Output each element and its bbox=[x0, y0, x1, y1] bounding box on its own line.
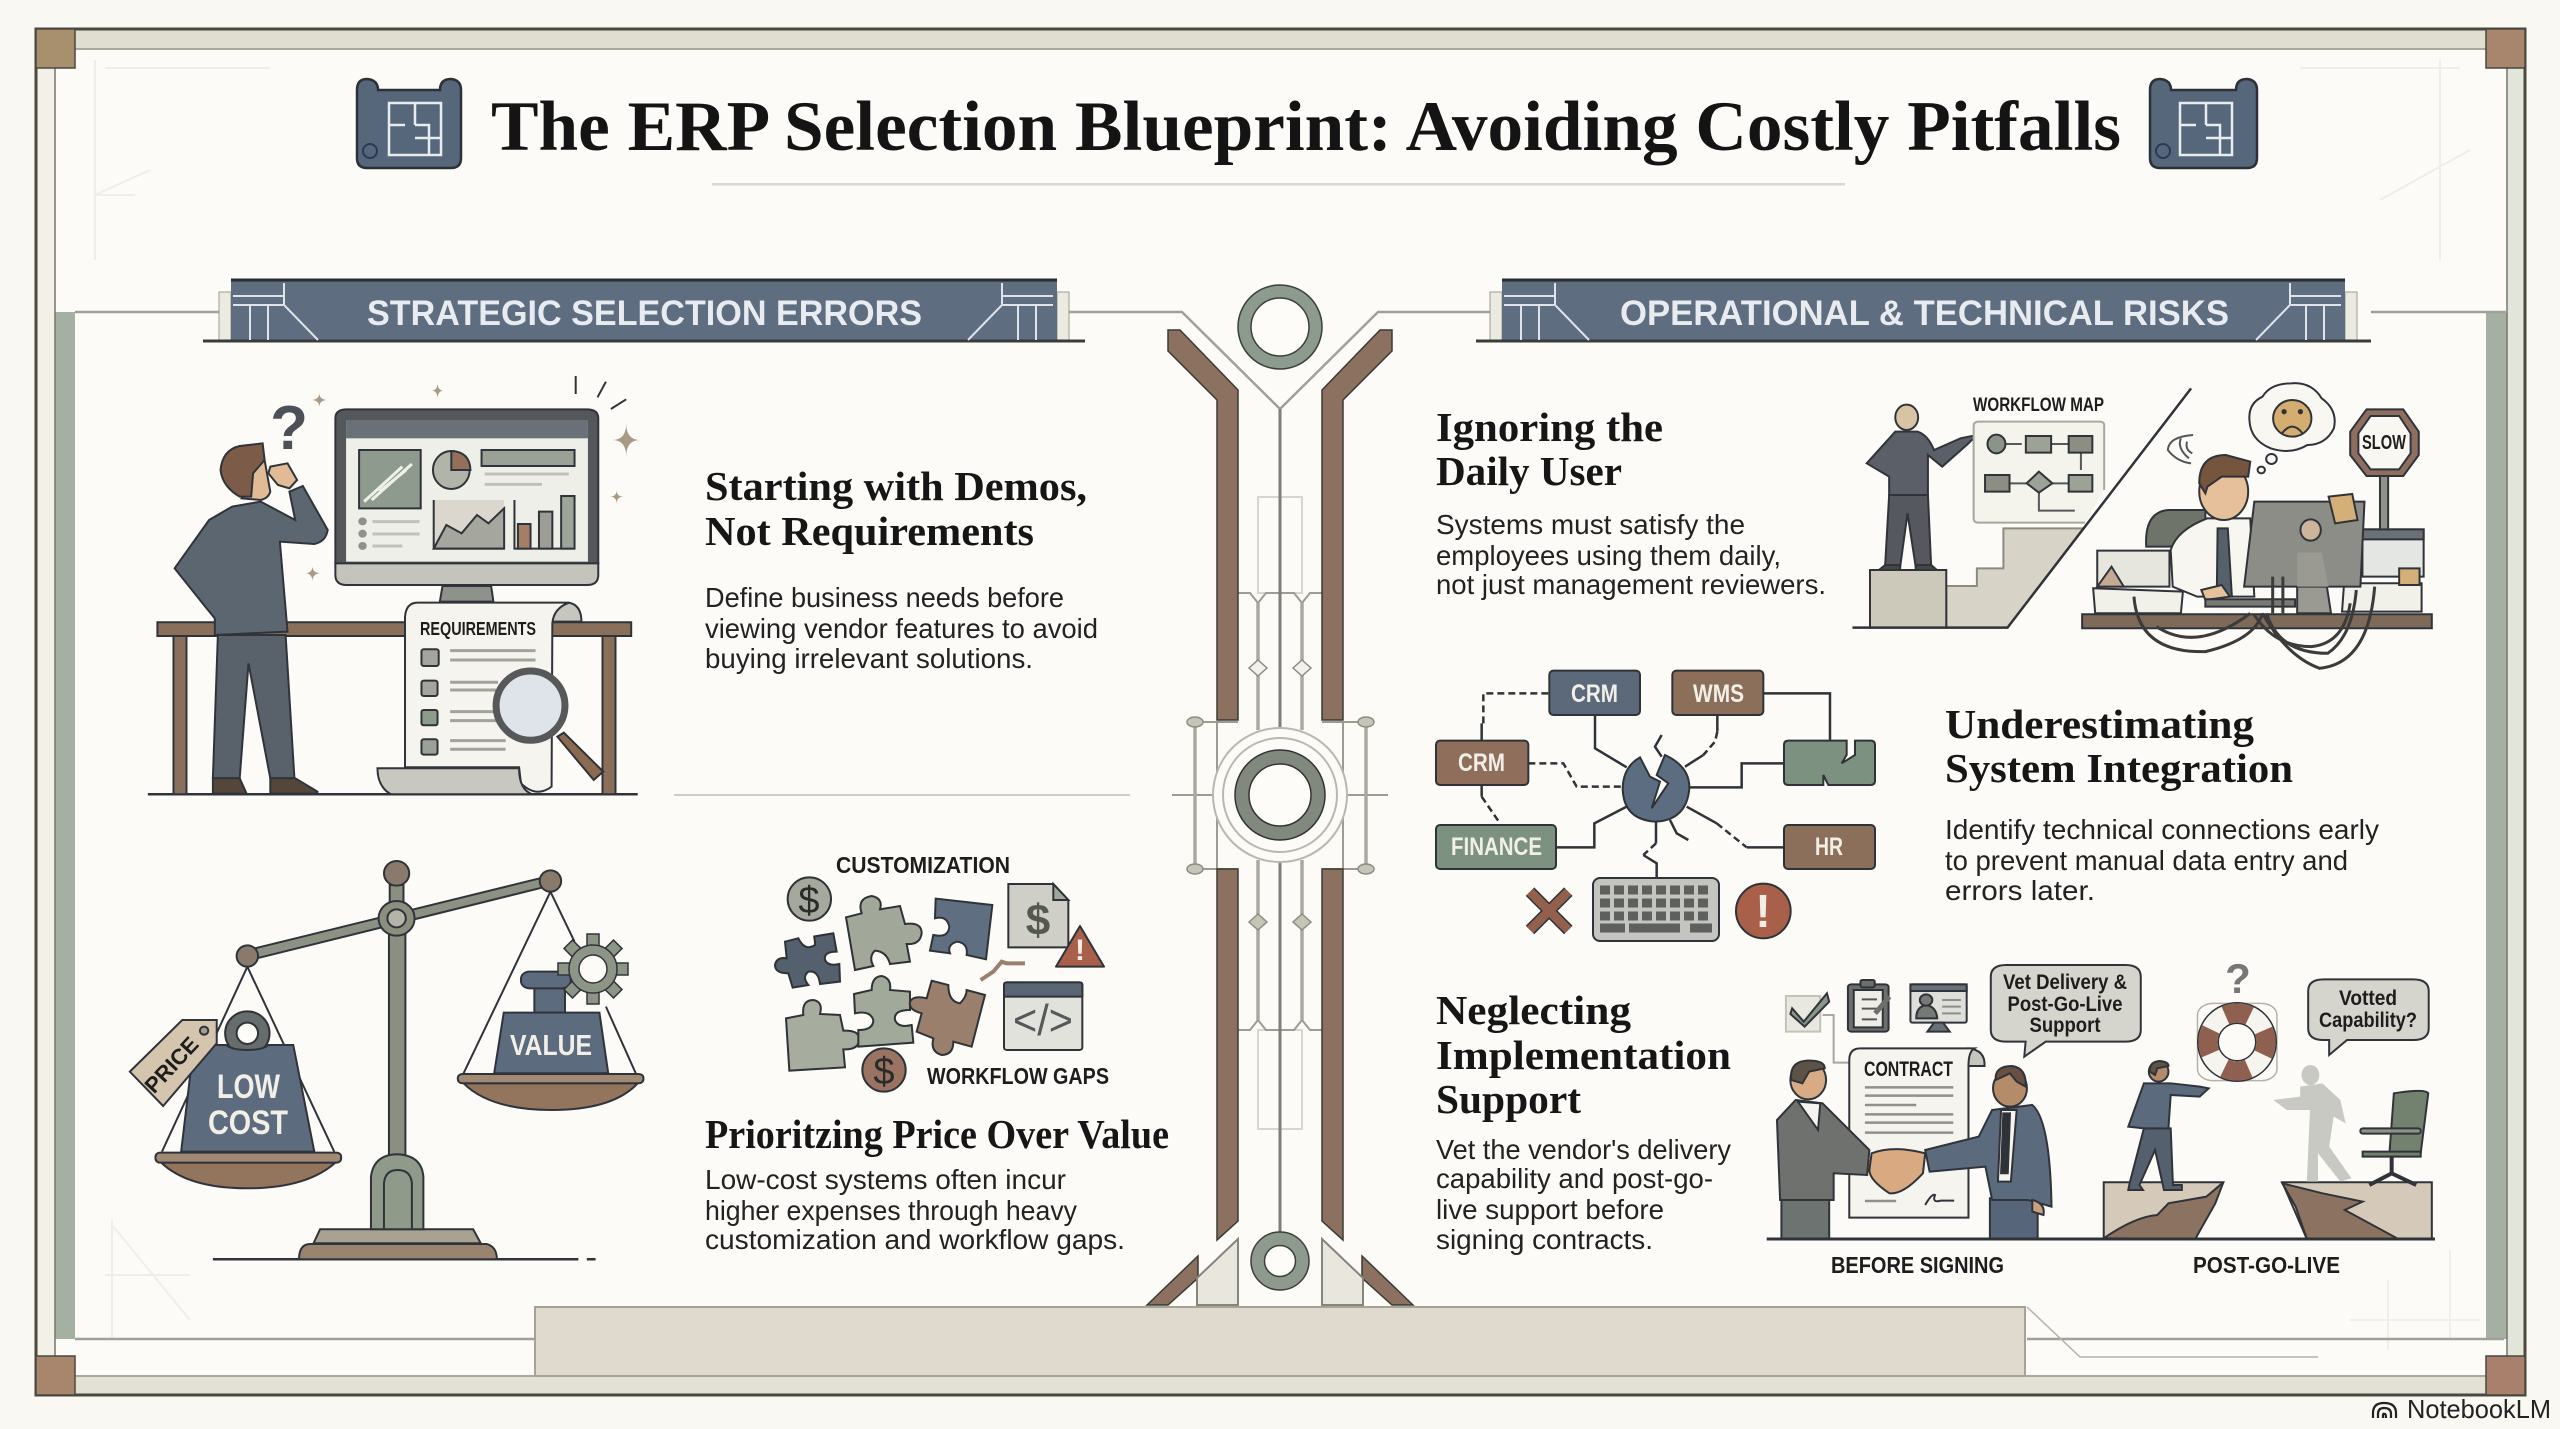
user monitor bbox=[2205, 494, 2364, 613]
body: neglecting implementation support bbox=[1436, 1134, 1731, 1255]
bubble text vet delivery: Post-Go-Live bbox=[2008, 993, 2122, 1016]
paper stacks bbox=[2093, 529, 2424, 613]
heading: underestimating integration bbox=[1945, 701, 2293, 791]
manager bbox=[1867, 405, 1977, 570]
stress scribble bbox=[2168, 435, 2193, 463]
speech bubble votted capability bbox=[2308, 979, 2429, 1055]
beam bbox=[237, 870, 561, 967]
gear bbox=[558, 934, 628, 1004]
system labels: HR bbox=[1815, 833, 1843, 861]
illustration: price versus value scale bbox=[130, 861, 643, 1259]
question mark: ? bbox=[270, 394, 308, 463]
heading: neglecting implementation support bbox=[1436, 987, 1731, 1122]
title underline bbox=[712, 183, 1845, 186]
heading: ignoring daily user: Ignoring the bbox=[1436, 404, 1663, 450]
system boxes bbox=[1549, 671, 1640, 715]
requirements label: REQUIREMENTS bbox=[420, 619, 536, 639]
alert mark: ! bbox=[1755, 885, 1771, 937]
left businessman bbox=[1777, 1061, 1869, 1239]
life ring bbox=[2208, 1013, 2266, 1071]
question mark: ? bbox=[2225, 955, 2251, 1002]
ghost figure bbox=[2273, 1065, 2351, 1182]
x mark bbox=[1530, 892, 1568, 930]
divider left bbox=[674, 794, 1130, 796]
bubble text vet delivery bbox=[2003, 971, 2127, 1037]
post go live label: POST-GO-LIVE bbox=[2193, 1252, 2340, 1278]
code window bbox=[1004, 982, 1082, 1050]
central blueprint spine bbox=[1147, 285, 1413, 1305]
puzzle pieces bbox=[775, 896, 992, 1071]
connectors bbox=[1482, 693, 1830, 878]
body: ignoring daily user: employees using them daily, bbox=[1436, 540, 1781, 571]
body: ignoring daily user bbox=[1436, 509, 1826, 600]
clipboard bbox=[1848, 980, 1889, 1032]
body: ignoring daily user: not just management reviewers. bbox=[1436, 569, 1826, 600]
body: underestimating integration: to prevent manual data entry and bbox=[1945, 845, 2348, 876]
arrow bbox=[981, 962, 1025, 980]
bubble text vet delivery: Vet Delivery & bbox=[2003, 971, 2127, 994]
keyboard bbox=[1593, 878, 1719, 941]
customization label: CUSTOMIZATION bbox=[836, 852, 1010, 878]
alert circle bbox=[1736, 884, 1791, 938]
system labels: FINANCE bbox=[1451, 833, 1542, 861]
workflow gaps label: WORKFLOW GAPS bbox=[927, 1063, 1109, 1089]
section header: operational and technical risks bbox=[1476, 280, 2371, 341]
price tag label: PRICE bbox=[139, 1032, 204, 1098]
coin glyphs bbox=[798, 880, 895, 1093]
before signing label: BEFORE SIGNING bbox=[1831, 1252, 2004, 1278]
monitor bbox=[335, 409, 598, 602]
base plate bbox=[535, 1307, 2025, 1376]
body: starting with demos: buying irrelevant solutions. bbox=[705, 643, 1033, 674]
speech bubble vet delivery bbox=[1991, 965, 2141, 1057]
office chair bbox=[2360, 1091, 2428, 1185]
system labels: CRM bbox=[1458, 749, 1505, 777]
heading: starting with demos: Starting with Demos, bbox=[705, 463, 1087, 509]
cliff right bbox=[2282, 1182, 2432, 1239]
candidate screen bbox=[1910, 984, 1967, 1032]
body: prioritizing price: higher expenses through heavy bbox=[705, 1195, 1077, 1226]
desk bbox=[157, 622, 631, 794]
notebooklm logo: NotebookLM bbox=[2407, 1394, 2551, 1424]
right businessman bbox=[1925, 1066, 2051, 1239]
warning mark: ! bbox=[1075, 934, 1085, 967]
body: prioritizing price bbox=[705, 1164, 1125, 1255]
price tag bbox=[130, 1020, 217, 1106]
body: neglecting implementation support: live support before bbox=[1436, 1194, 1664, 1225]
bottom ring bbox=[1258, 1239, 1302, 1283]
body: underestimating integration: Identify technical connections early bbox=[1945, 814, 2379, 845]
centre rings bbox=[1213, 728, 1347, 862]
requirements scroll bbox=[377, 603, 581, 794]
body: underestimating integration: errors later. bbox=[1945, 875, 2095, 906]
body: neglecting implementation support: signing contracts. bbox=[1436, 1224, 1653, 1255]
bubble text vet delivery: Support bbox=[2030, 1014, 2101, 1037]
walking figure bbox=[2128, 1061, 2209, 1190]
cracked hub bbox=[1623, 755, 1689, 822]
system labels: CRM bbox=[1571, 680, 1618, 708]
bubble text votted capability bbox=[2319, 987, 2417, 1032]
body: starting with demos: viewing vendor features to avoid bbox=[705, 613, 1098, 644]
coins bbox=[788, 877, 831, 921]
bubble text votted capability: Votted bbox=[2339, 987, 2397, 1010]
man bbox=[175, 443, 328, 794]
life ring placeholder frame bbox=[2197, 1003, 2277, 1081]
contract bbox=[1849, 1048, 1985, 1218]
heading: starting with demos bbox=[705, 463, 1087, 554]
illustration: before signing versus post go live bbox=[1767, 955, 2435, 1278]
system labels bbox=[1451, 680, 1843, 861]
handshake bbox=[1869, 1149, 1925, 1193]
user bbox=[2171, 455, 2254, 600]
body: neglecting implementation support: capability and post-go- bbox=[1436, 1163, 1713, 1194]
heading: prioritizing price: Prioritzing Price Over Value bbox=[705, 1111, 1169, 1157]
workflow board bbox=[1974, 422, 2104, 523]
left pan bbox=[155, 1153, 341, 1188]
heading: ignoring daily user bbox=[1436, 404, 1663, 494]
low cost label: COST bbox=[208, 1104, 288, 1142]
low cost label: LOW bbox=[217, 1068, 281, 1106]
coin glyphs: $ bbox=[873, 1051, 895, 1093]
warning triangle bbox=[1056, 926, 1104, 967]
section header: strategic selection errors bbox=[203, 280, 1085, 341]
slow label: SLOW bbox=[2362, 432, 2406, 454]
illustration: puzzle pieces of hidden costs bbox=[775, 852, 1109, 1093]
value weight bbox=[494, 972, 608, 1073]
body: neglecting implementation support: Vet the vendor's delivery bbox=[1436, 1134, 1731, 1165]
header text: STRATEGIC SELECTION ERRORS bbox=[367, 294, 922, 333]
coin glyphs: $ bbox=[798, 880, 820, 922]
body: starting with demos: Define business needs before bbox=[705, 582, 1064, 613]
document dollar: $ bbox=[1026, 896, 1050, 945]
illustration: broken system integration bbox=[1436, 671, 1875, 941]
body: ignoring daily user: Systems must satisfy the bbox=[1436, 509, 1745, 540]
heading: neglecting implementation support: Neglecting bbox=[1436, 987, 1632, 1033]
body: starting with demos bbox=[705, 582, 1098, 674]
value label: VALUE bbox=[510, 1030, 592, 1062]
bubble text votted capability: Capability? bbox=[2319, 1009, 2417, 1032]
contract label: CONTRACT bbox=[1864, 1058, 1953, 1081]
heading: ignoring daily user: Daily User bbox=[1436, 448, 1622, 494]
top ring bbox=[1244, 291, 1316, 363]
heading: underestimating integration: System Integration bbox=[1945, 745, 2293, 791]
steps bbox=[1946, 528, 2084, 628]
sparkles bbox=[305, 383, 640, 582]
check box bbox=[1786, 993, 1849, 1063]
user chair bbox=[2146, 510, 2205, 547]
brown rails bbox=[1147, 330, 1413, 1305]
heading: starting with demos: Not Requirements bbox=[705, 508, 1034, 554]
code glyph: </> bbox=[1013, 996, 1073, 1045]
heading: neglecting implementation support: Support bbox=[1436, 1076, 1581, 1122]
right pan bbox=[458, 1074, 643, 1110]
illustration: manager versus daily user bbox=[1852, 383, 2432, 668]
thought bubble bbox=[2249, 383, 2335, 473]
body: prioritizing price: Low-cost systems often incur bbox=[705, 1164, 1066, 1195]
low cost label bbox=[208, 1068, 288, 1142]
header text: OPERATIONAL & TECHNICAL RISKS bbox=[1620, 294, 2229, 333]
magnifier bbox=[496, 671, 603, 780]
slow sign bbox=[2350, 409, 2419, 529]
icon: blueprint scroll right bbox=[2150, 79, 2257, 168]
low cost weight bbox=[181, 1011, 314, 1152]
document bbox=[1008, 884, 1068, 947]
stand bbox=[299, 861, 497, 1259]
heading: neglecting implementation support: Implementation bbox=[1436, 1032, 1731, 1078]
tangled cables bbox=[2134, 577, 2375, 668]
desk bbox=[2082, 614, 2432, 628]
title: The ERP Selection Blueprint: Avoiding Costly Pitfalls bbox=[491, 88, 2121, 166]
workflow map label: WORKFLOW MAP bbox=[1973, 395, 2104, 416]
illustration: man comparing demo and requirements bbox=[148, 376, 640, 794]
body: underestimating integration bbox=[1945, 814, 2379, 906]
system labels: WMS bbox=[1693, 680, 1744, 708]
cliff left bbox=[2104, 1182, 2223, 1239]
body: prioritizing price: customization and workflow gaps. bbox=[705, 1224, 1125, 1255]
heading: underestimating integration: Underestimating bbox=[1945, 701, 2255, 747]
icon: blueprint scroll left bbox=[357, 79, 461, 168]
